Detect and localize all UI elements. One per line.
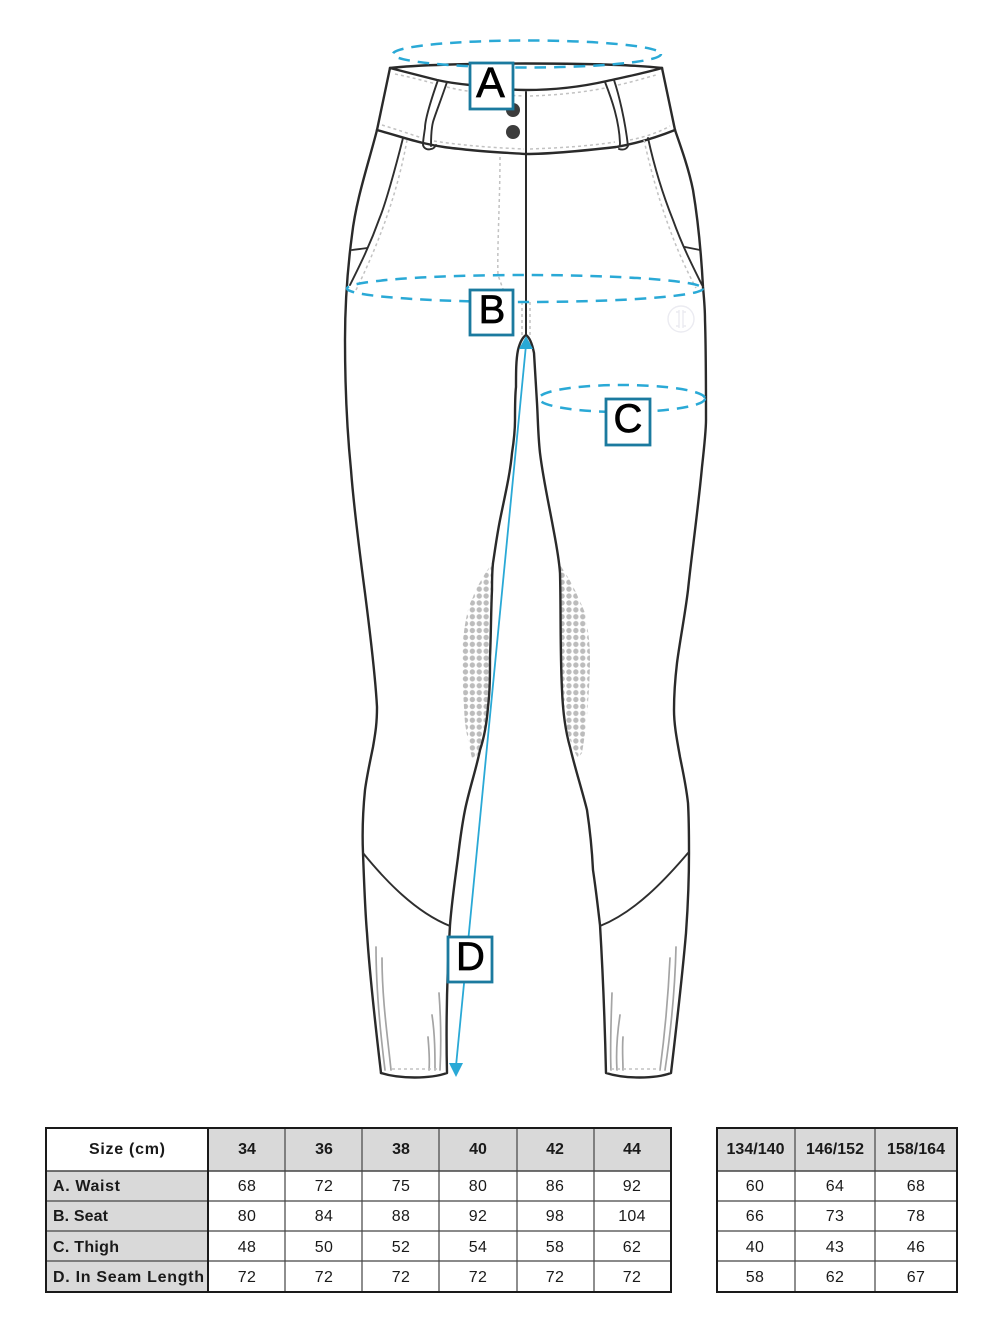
kids row C: 46 — [907, 1239, 925, 1256]
row: D. In Seam Length: 72 — [546, 1269, 564, 1286]
table header row: 38 — [392, 1141, 410, 1158]
table header row: 44 — [623, 1141, 641, 1158]
kids row A: 64 — [826, 1178, 844, 1195]
kids header shading — [717, 1128, 957, 1171]
left knee grip — [462, 563, 492, 758]
row: A. Waist: 86 — [546, 1178, 564, 1195]
table header row: Size (cm) — [89, 1141, 165, 1158]
measurement C: thigh: C — [614, 397, 642, 441]
row: D. In Seam Length — [53, 1269, 641, 1286]
size table: adult sizes — [46, 1128, 671, 1292]
kids row D: 58 — [746, 1269, 764, 1286]
measurement D: in seam length: D — [456, 935, 485, 979]
kids header row — [726, 1141, 945, 1158]
row: C. Thigh: 54 — [469, 1239, 487, 1256]
row: B. Seat: 84 — [315, 1208, 333, 1225]
measurement A: waist: A — [476, 59, 505, 107]
kids row C — [746, 1239, 925, 1256]
table header row: 40 — [469, 1141, 487, 1158]
kids row C: 40 — [746, 1239, 764, 1256]
kids row D: 62 — [826, 1269, 844, 1286]
table header row — [89, 1141, 641, 1158]
table grid — [46, 1128, 671, 1292]
buttons — [506, 103, 520, 139]
row: D. In Seam Length: 72 — [238, 1269, 256, 1286]
table header row: 42 — [546, 1141, 564, 1158]
row: B. Seat: 98 — [546, 1208, 564, 1225]
row: A. Waist: 68 — [238, 1178, 256, 1195]
kids row B: 78 — [907, 1208, 925, 1225]
kids row A: 68 — [907, 1178, 925, 1195]
row: D. In Seam Length: D. In Seam Length — [53, 1269, 204, 1286]
belt loops — [423, 80, 628, 150]
kids row B: 66 — [746, 1208, 764, 1225]
hem wrinkles — [376, 947, 676, 1070]
row: A. Waist: 75 — [392, 1178, 410, 1195]
row: A. Waist: 92 — [623, 1178, 641, 1195]
row: B. Seat — [53, 1208, 646, 1225]
logo watermark — [668, 306, 694, 332]
row: B. Seat: 88 — [392, 1208, 410, 1225]
row: D. In Seam Length: 72 — [469, 1269, 487, 1286]
row: C. Thigh: 48 — [238, 1239, 256, 1256]
cuff seams — [363, 853, 688, 926]
kids row A — [746, 1178, 925, 1195]
measurement D: in seam length — [448, 336, 533, 1077]
pockets — [350, 138, 702, 290]
row: A. Waist: A. Waist — [53, 1178, 121, 1195]
kids table grid — [717, 1128, 957, 1292]
row: C. Thigh: 62 — [623, 1239, 641, 1256]
breeches line drawing — [345, 64, 706, 1078]
kids header row: 134/140 — [726, 1141, 785, 1158]
row: C. Thigh: 58 — [546, 1239, 564, 1256]
row: D. In Seam Length: 72 — [392, 1269, 410, 1286]
row: A. Waist — [53, 1178, 641, 1195]
table header row: 36 — [315, 1141, 333, 1158]
kids row C: 43 — [826, 1239, 844, 1256]
kids row A: 60 — [746, 1178, 764, 1195]
table shading — [46, 1128, 671, 1292]
row: B. Seat: 92 — [469, 1208, 487, 1225]
row: D. In Seam Length: 72 — [623, 1269, 641, 1286]
row: C. Thigh: C. Thigh — [53, 1239, 119, 1256]
leg outlines — [345, 130, 706, 1078]
measurement B: seat: B — [479, 288, 505, 332]
row: B. Seat: 104 — [618, 1208, 646, 1225]
kids header row: 158/164 — [887, 1141, 945, 1158]
kids row B — [746, 1208, 925, 1225]
center seam and fly stitching — [498, 92, 530, 336]
measurement B: seat — [347, 275, 703, 335]
row: A. Waist: 80 — [469, 1178, 487, 1195]
row: D. In Seam Length: 72 — [315, 1269, 333, 1286]
row: B. Seat: B. Seat — [53, 1208, 109, 1225]
row: C. Thigh — [53, 1239, 641, 1256]
kids header row: 146/152 — [806, 1141, 864, 1158]
knee grip patches — [462, 563, 590, 758]
kids row B: 73 — [826, 1208, 844, 1225]
row: C. Thigh: 50 — [315, 1239, 333, 1256]
kids row D: 67 — [907, 1269, 925, 1286]
size table: kids sizes — [717, 1128, 957, 1292]
measurement C: thigh — [539, 385, 705, 445]
row: B. Seat: 80 — [238, 1208, 256, 1225]
row: C. Thigh: 52 — [392, 1239, 410, 1256]
kids row D — [746, 1269, 925, 1286]
measurement A: waist — [393, 40, 661, 109]
row: A. Waist: 72 — [315, 1178, 333, 1195]
waistband — [377, 64, 675, 154]
right knee grip — [560, 565, 590, 758]
table header row: 34 — [238, 1141, 256, 1158]
